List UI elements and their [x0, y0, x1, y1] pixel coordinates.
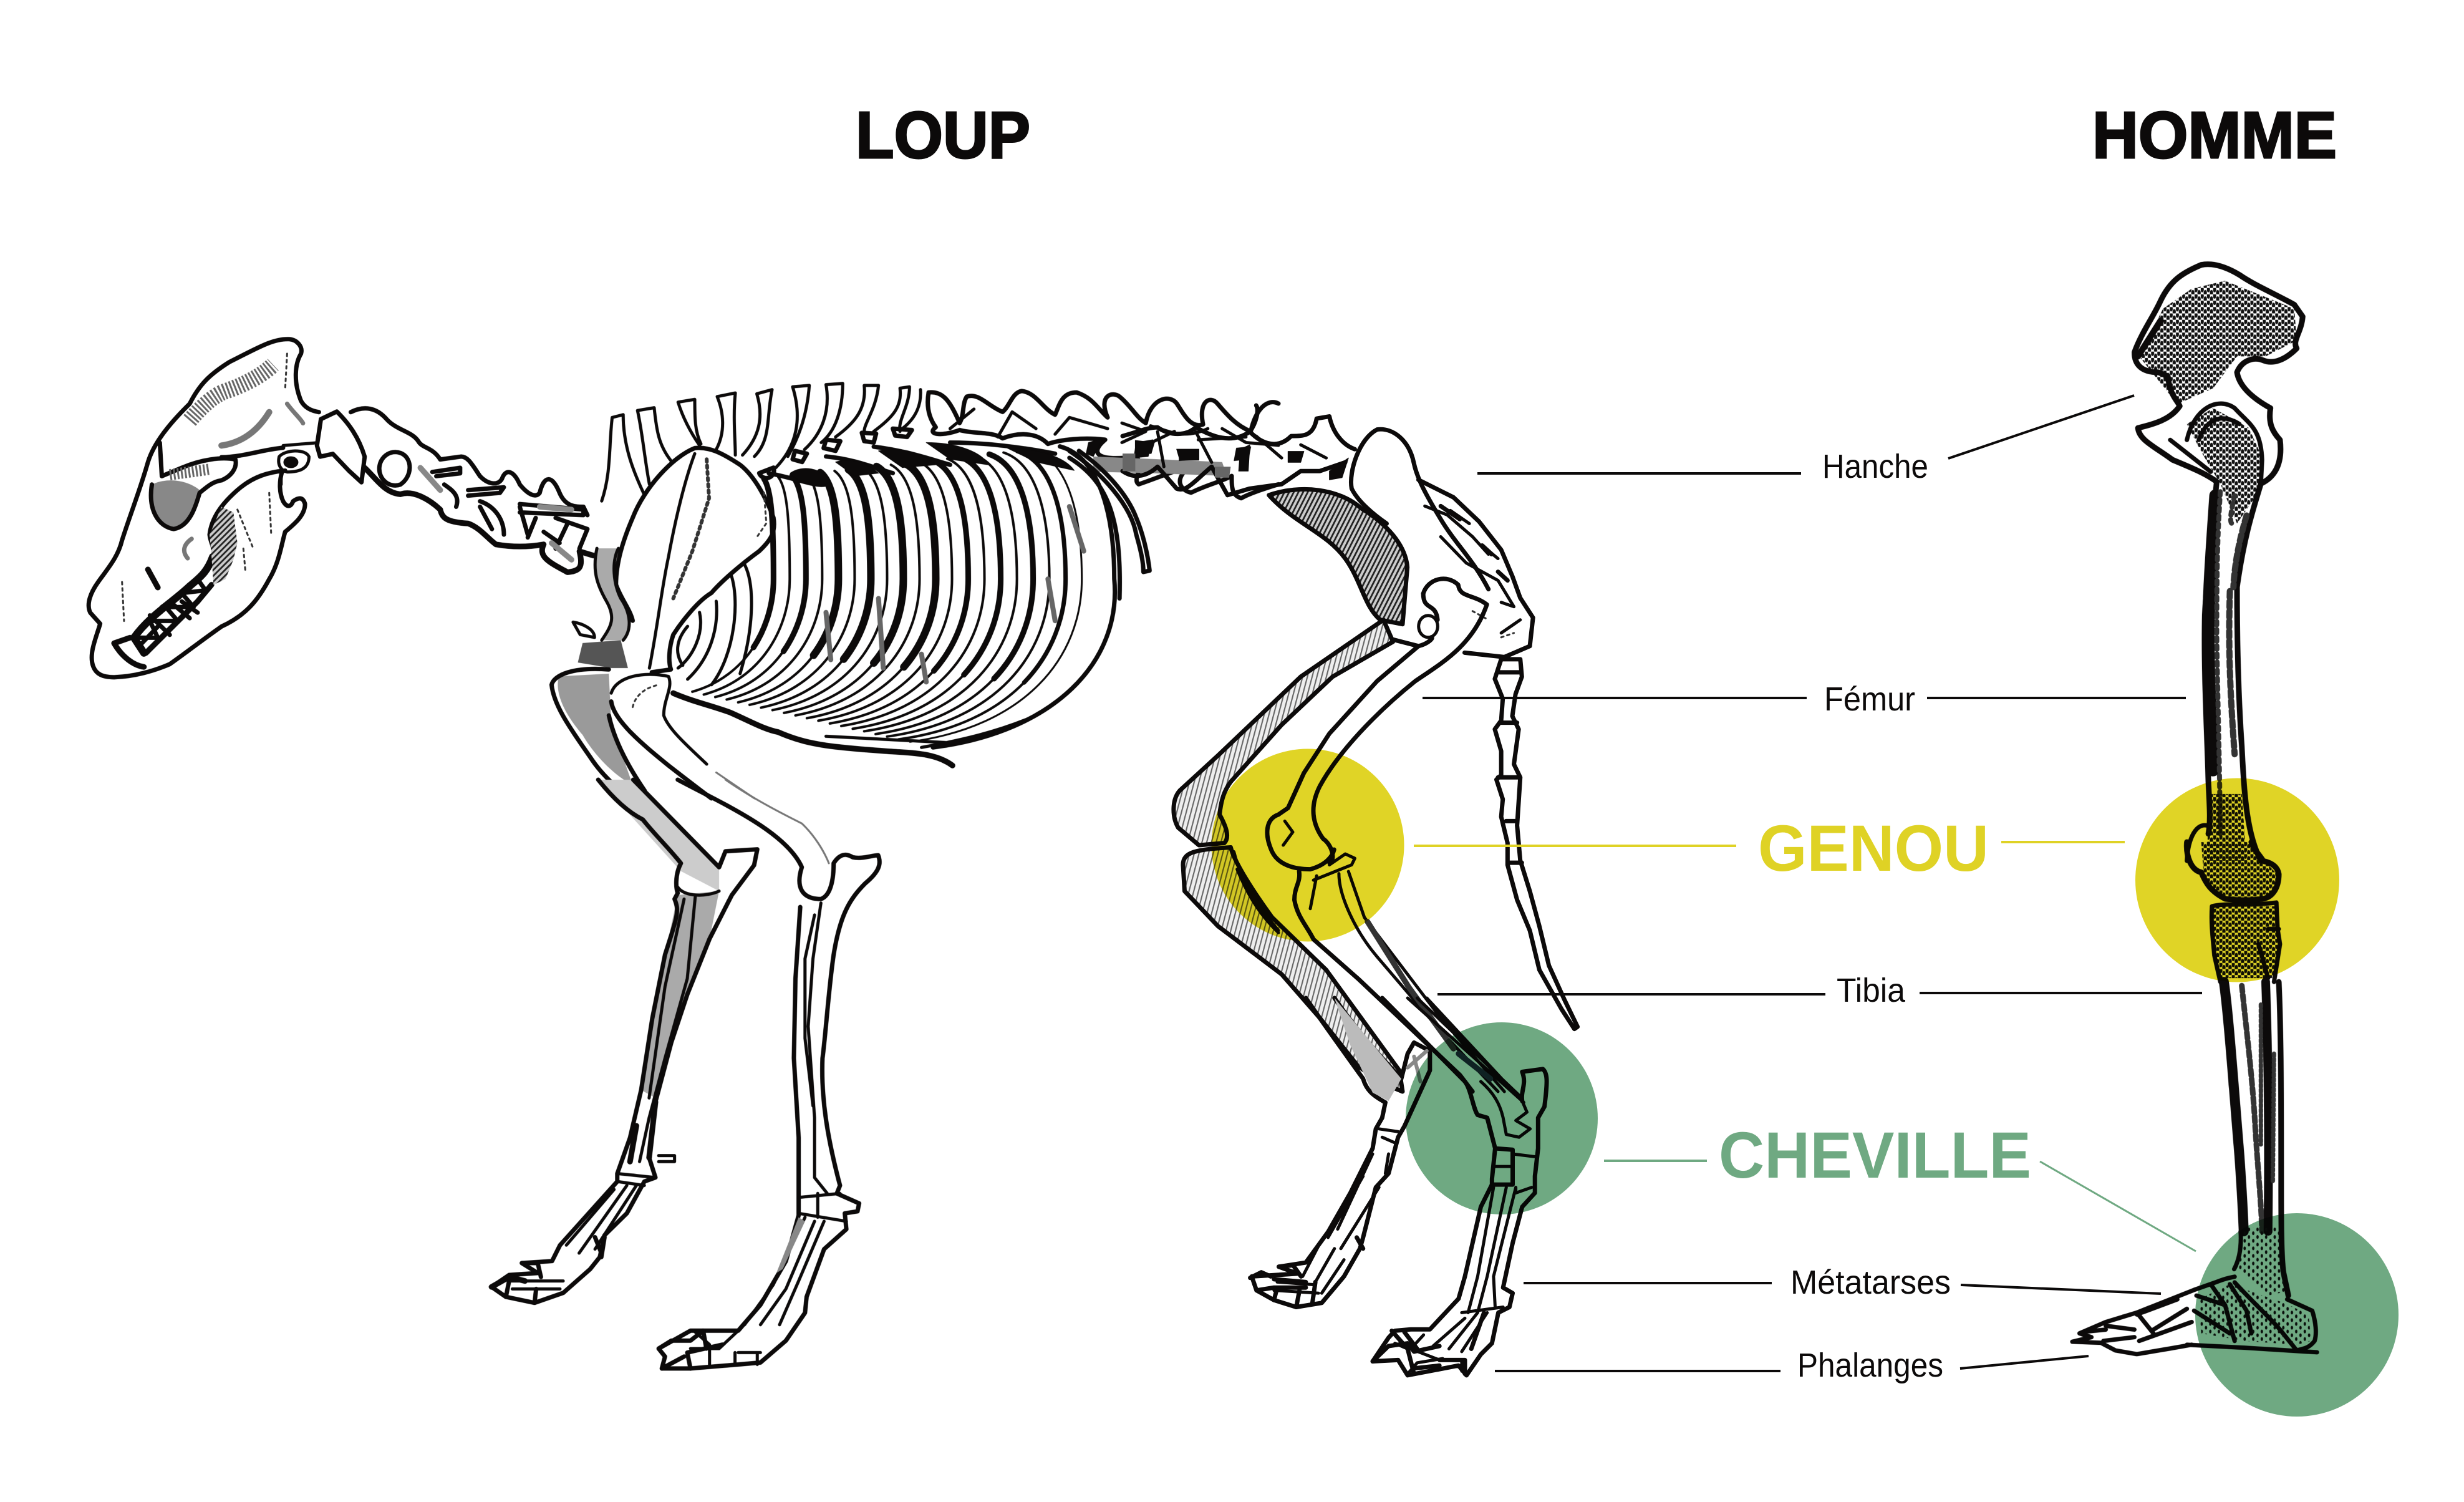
callout: Métatarses: Métatarses	[1790, 1264, 1951, 1301]
wolf skull and neck	[89, 339, 593, 677]
callout: Tibia: Tibia	[1837, 972, 1906, 1009]
human knee, lower leg and foot	[2072, 842, 2317, 1354]
leg bones	[2224, 982, 2288, 1296]
last lumbar vertebrae	[1123, 405, 1355, 495]
hatched bone above femur	[1269, 489, 1408, 624]
tail	[1495, 659, 1578, 1029]
hatched shank band	[1183, 848, 1403, 1092]
callout: CHEVILLE	[1604, 1119, 2196, 1251]
title: HOMME: HOMME	[2092, 99, 2337, 172]
wolf thorax: spine, scapula, ribs	[551, 384, 1278, 798]
illustration: skeletons	[89, 264, 2317, 1375]
callout: Métatarses	[1524, 1264, 2161, 1301]
thick upper rib shadows	[753, 476, 806, 651]
wolf near hind ankle and foot; far hind foot	[1250, 998, 1547, 1375]
callout: Fémur: Fémur	[1824, 681, 1915, 718]
callout: Hanche: Hanche	[1822, 448, 1928, 485]
highlight: human ankle circle	[2195, 1213, 2399, 1417]
callout: GENOU: GENOU	[1758, 812, 1989, 885]
foot	[2072, 1277, 2317, 1354]
title: LOUP: LOUP	[856, 99, 1030, 172]
highlight: wolf ankle circle	[1406, 1022, 1598, 1214]
callout: Phalanges	[1495, 1347, 2089, 1384]
hatched thigh band	[1174, 620, 1393, 845]
femur	[1313, 579, 1487, 863]
sacrum	[1418, 480, 1533, 657]
femur shaft	[2205, 482, 2216, 834]
far foreleg	[491, 780, 757, 1303]
near foreleg	[659, 780, 879, 1369]
neck vertebrae	[317, 409, 593, 572]
pelvis	[2139, 281, 2297, 404]
knee	[2186, 842, 2280, 982]
callout: CHEVILLE: CHEVILLE	[1719, 1119, 2031, 1192]
ilium	[1351, 429, 1489, 589]
wolf hindquarters: lumbar spine, pelvis, femur, tail	[1123, 405, 1578, 1092]
far hind leg	[1250, 998, 1430, 1307]
highlight: wolf knee circle	[1211, 749, 1404, 942]
highlight: human knee circle	[2135, 778, 2339, 982]
near hind leg	[1373, 998, 1547, 1375]
scapula	[616, 448, 774, 672]
human pelvis and femur	[2134, 264, 2302, 861]
ribs	[674, 442, 1149, 765]
wolf forelegs	[491, 780, 879, 1369]
shoulder and upper forelimb	[551, 548, 755, 798]
tibia head and shaft	[1295, 871, 1472, 1092]
dorsal spines	[602, 384, 1278, 501]
callout: Hanche	[1477, 395, 2134, 485]
callout: Phalanges: Phalanges	[1797, 1347, 1943, 1384]
